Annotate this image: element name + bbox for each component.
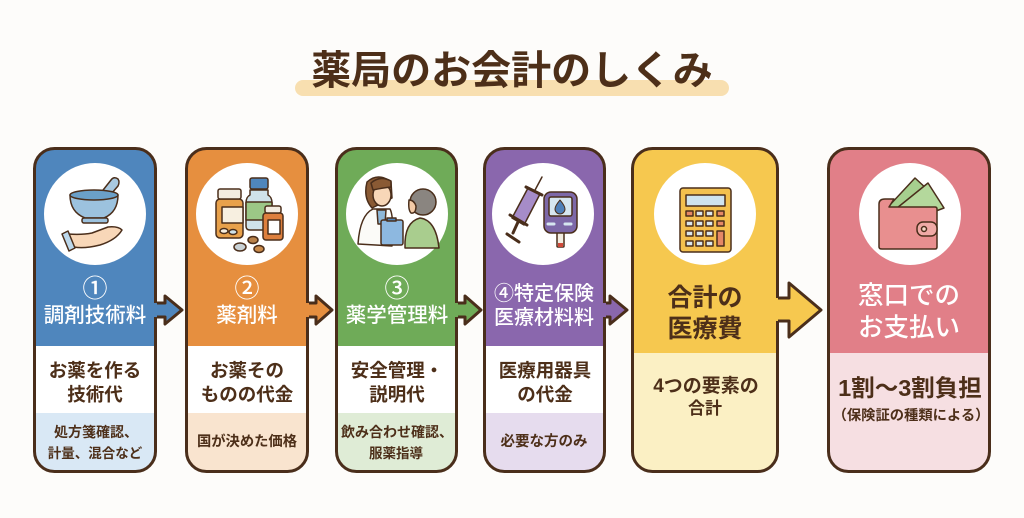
detail: 服薬指導: [369, 445, 423, 461]
step number: ③: [384, 275, 410, 303]
icon: pharmacist and patient: [358, 177, 439, 248]
step name: 薬学管理料: [346, 304, 448, 327]
description: 安全管理・: [351, 360, 443, 381]
co-payment rate: 1割～3割負担: [838, 375, 982, 401]
detail: 必要な方のみ: [500, 432, 588, 450]
detail: 飲み合わせ確認、: [341, 424, 453, 440]
description: [653, 375, 759, 418]
heading: 窓口での: [858, 282, 960, 310]
panel: step 3 pharmaceutical management fee: [336, 148, 458, 472]
heading: お支払い: [858, 314, 960, 342]
icon: mortar and pestle on hand: [62, 178, 122, 251]
panel: payment at the counter: [828, 148, 992, 472]
step name: 調剤技術料: [44, 304, 146, 327]
panel: step 4 insured materials fee: [484, 148, 606, 472]
detail: 国が決めた価格: [197, 432, 298, 450]
arrow: step 2 to 3: [305, 296, 332, 324]
panel: total medical cost: [632, 148, 778, 472]
arrow: step 1 to 2: [153, 296, 182, 324]
note: （保険証の種類による）: [833, 407, 989, 424]
description: 技術代: [67, 384, 123, 405]
description: 合計: [688, 399, 722, 418]
arrow: step 3 to 4: [454, 296, 481, 324]
detail: [48, 424, 143, 461]
icon: calculator: [680, 188, 731, 252]
heading: [667, 284, 743, 343]
panel: step 2 drug fee: [186, 148, 308, 472]
description: [49, 360, 141, 405]
description: [201, 360, 294, 405]
detail: 処方箋確認、: [54, 424, 138, 440]
arrow: total to payment: [775, 283, 821, 337]
heading: 合計の: [667, 284, 743, 312]
title: 薬局のお会計のしくみ: [311, 49, 713, 93]
icon: wallet with banknotes: [879, 178, 944, 249]
description: 説明代: [369, 384, 425, 405]
description: お薬を作る: [49, 360, 141, 381]
heading: 医療費: [667, 315, 743, 343]
step name: ④特定保険: [494, 282, 594, 305]
description: の代金: [517, 384, 573, 405]
panel: step 1 dispensing fee: [34, 148, 156, 472]
heading: [858, 282, 960, 342]
description: [499, 360, 591, 405]
description: [351, 360, 443, 405]
description: 医療用器具: [499, 360, 591, 381]
step name: [494, 282, 594, 329]
detail: 計量、混合など: [48, 446, 143, 461]
detail: [341, 424, 453, 461]
description: ものの代金: [201, 384, 294, 405]
step number: ①: [82, 275, 108, 303]
arrow: step 4 to total: [602, 296, 627, 324]
description: お薬その: [210, 360, 284, 381]
icon: syringe and glucose meter: [507, 177, 577, 247]
description: 4つの要素の: [653, 375, 759, 397]
step name: 薬剤料: [216, 304, 278, 327]
step number: ②: [234, 275, 260, 303]
step name: 医療材料料: [494, 306, 594, 329]
icon: medicine bottles and pills: [216, 178, 283, 252]
